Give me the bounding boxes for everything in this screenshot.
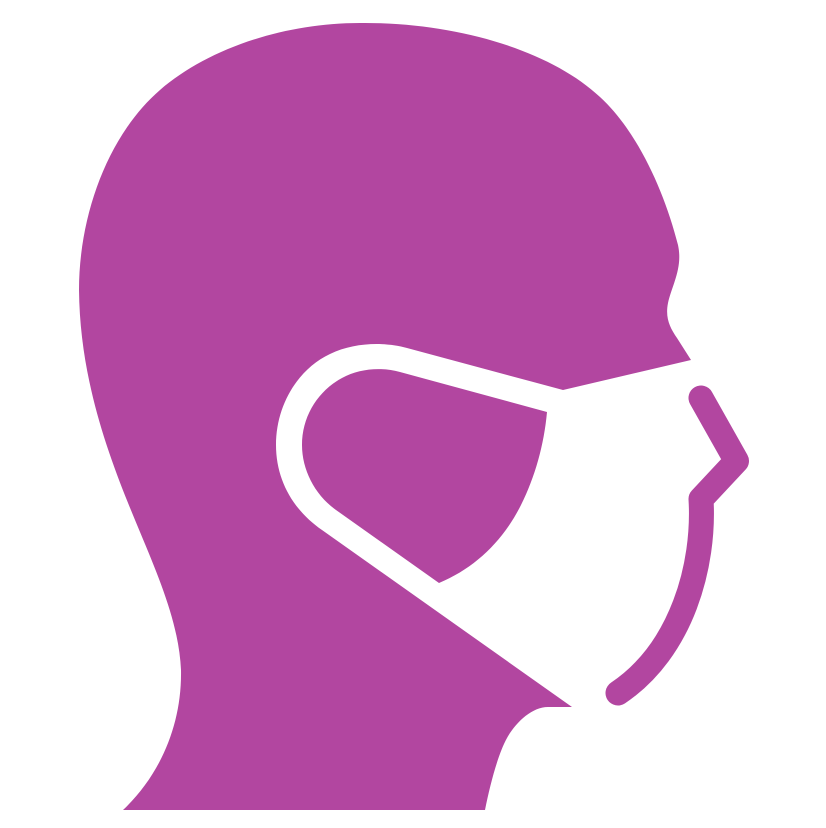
head silhouette xyxy=(79,23,691,810)
mask outline: nose and chin contour xyxy=(618,398,736,693)
mask inner cheek area xyxy=(302,369,547,583)
